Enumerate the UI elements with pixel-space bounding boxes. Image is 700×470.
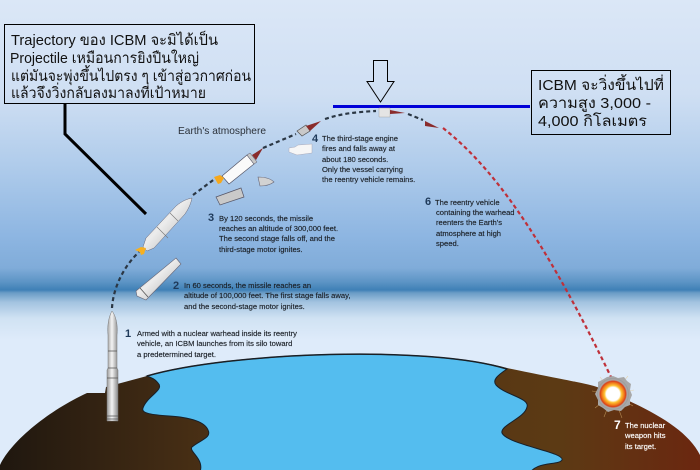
callout: altitude: 4,000 กิโลเมตร xyxy=(538,112,647,130)
step 4 text: the reentry vehicle remains. xyxy=(322,175,415,184)
blue altitude line xyxy=(333,105,530,108)
step 4 text: The third-stage engine xyxy=(322,134,398,143)
third stage dropped xyxy=(289,144,312,155)
icon: down arrow xyxy=(367,60,394,102)
land xyxy=(0,354,700,470)
step 4 text: 4 xyxy=(312,133,319,145)
step 7 text: The nuclear xyxy=(625,421,666,430)
step 6 text: speed. xyxy=(436,239,459,248)
step 1 text: 1 xyxy=(125,328,131,340)
trajectory xyxy=(112,111,611,377)
callout: trajectory: Projectile เหมือนการยิงปืนใหญ่ xyxy=(10,49,199,67)
step 1 text xyxy=(125,328,297,359)
callout: trajectory: แต่มันจะพุ่งขึ้นไปตรง ๆ เข้าสู่อวกาศก่อน xyxy=(11,65,251,86)
first stage falling xyxy=(136,258,181,300)
rays xyxy=(592,376,634,418)
step 6 text: 6 xyxy=(425,196,431,208)
step 2 text: and the second-stage motor ignites. xyxy=(184,302,305,311)
step 7 text: weapon hits xyxy=(624,431,666,440)
step 3 text: third-stage motor ignites. xyxy=(219,245,303,254)
step 7 text: its target. xyxy=(625,442,656,451)
step 3 text: The second stage falls off, and the xyxy=(219,234,335,243)
step 6 text xyxy=(425,196,515,248)
reentry vehicle tip xyxy=(425,121,439,128)
dropped second stage pieces xyxy=(216,177,274,205)
callout: trajectory xyxy=(4,24,254,104)
step 1 text: vehicle, an ICBM launches from its silo toward xyxy=(137,339,292,348)
step 2 text xyxy=(173,280,350,311)
flame xyxy=(135,247,146,255)
step 6 text: containing the warhead xyxy=(436,208,515,217)
label: atmosphere: Earth's atmosphere xyxy=(178,125,266,137)
step 6 text: reenters the Earth's xyxy=(436,218,502,227)
missile on launch xyxy=(107,311,118,421)
step 6 text: The reentry vehicle xyxy=(435,198,500,207)
callout: altitude: ความสูง 3,000 - xyxy=(538,95,651,112)
horizon edge xyxy=(147,354,507,376)
step 3 text: 3 xyxy=(208,212,214,224)
step 4 text xyxy=(312,133,415,184)
callout: altitude xyxy=(532,70,670,134)
earth xyxy=(0,354,700,470)
ascent path xyxy=(112,111,423,308)
step 4 text: about 180 seconds. xyxy=(322,155,388,164)
step 1 text: a predetermined target. xyxy=(137,350,216,359)
callout: trajectory: แล้วจึงวิ่งกลับลงมาลงที่เป้าหมาย xyxy=(11,82,206,102)
step 7 text xyxy=(614,418,666,451)
vehicle at apogee xyxy=(379,108,405,117)
descent path xyxy=(443,128,611,377)
step 6 text: atmosphere at high xyxy=(436,229,501,238)
step 3 text: reaches an altitude of 300,000 feet. xyxy=(219,224,338,233)
step 3 text xyxy=(208,212,338,254)
flame xyxy=(214,175,224,184)
third stage with flame xyxy=(214,148,263,184)
callout leader line xyxy=(65,103,146,214)
reentry vehicle stage 4 xyxy=(297,121,321,136)
callout: altitude: ICBM จะวิ่งขึ้นไปที่ xyxy=(538,74,664,94)
second stage missile in flight xyxy=(135,198,192,255)
blast xyxy=(592,376,634,418)
step 1 text: Armed with a nuclear warhead inside its reentry xyxy=(137,329,297,338)
step 2 text: 2 xyxy=(173,280,179,292)
callout: trajectory: Trajectory ของ ICBM จะมิได้เป็น xyxy=(11,30,218,49)
step 4 text: Only the vessel carrying xyxy=(322,165,403,174)
step 3 text: By 120 seconds, the missile xyxy=(219,214,313,223)
ocean xyxy=(143,354,562,470)
step 4 text: fires and falls away at xyxy=(322,144,396,153)
step 7 text: 7 xyxy=(614,418,621,432)
step 2 text: In 60 seconds, the missile reaches an xyxy=(184,281,311,290)
step 2 text: altitude of 100,000 feet. The first stage falls away, xyxy=(184,291,350,300)
